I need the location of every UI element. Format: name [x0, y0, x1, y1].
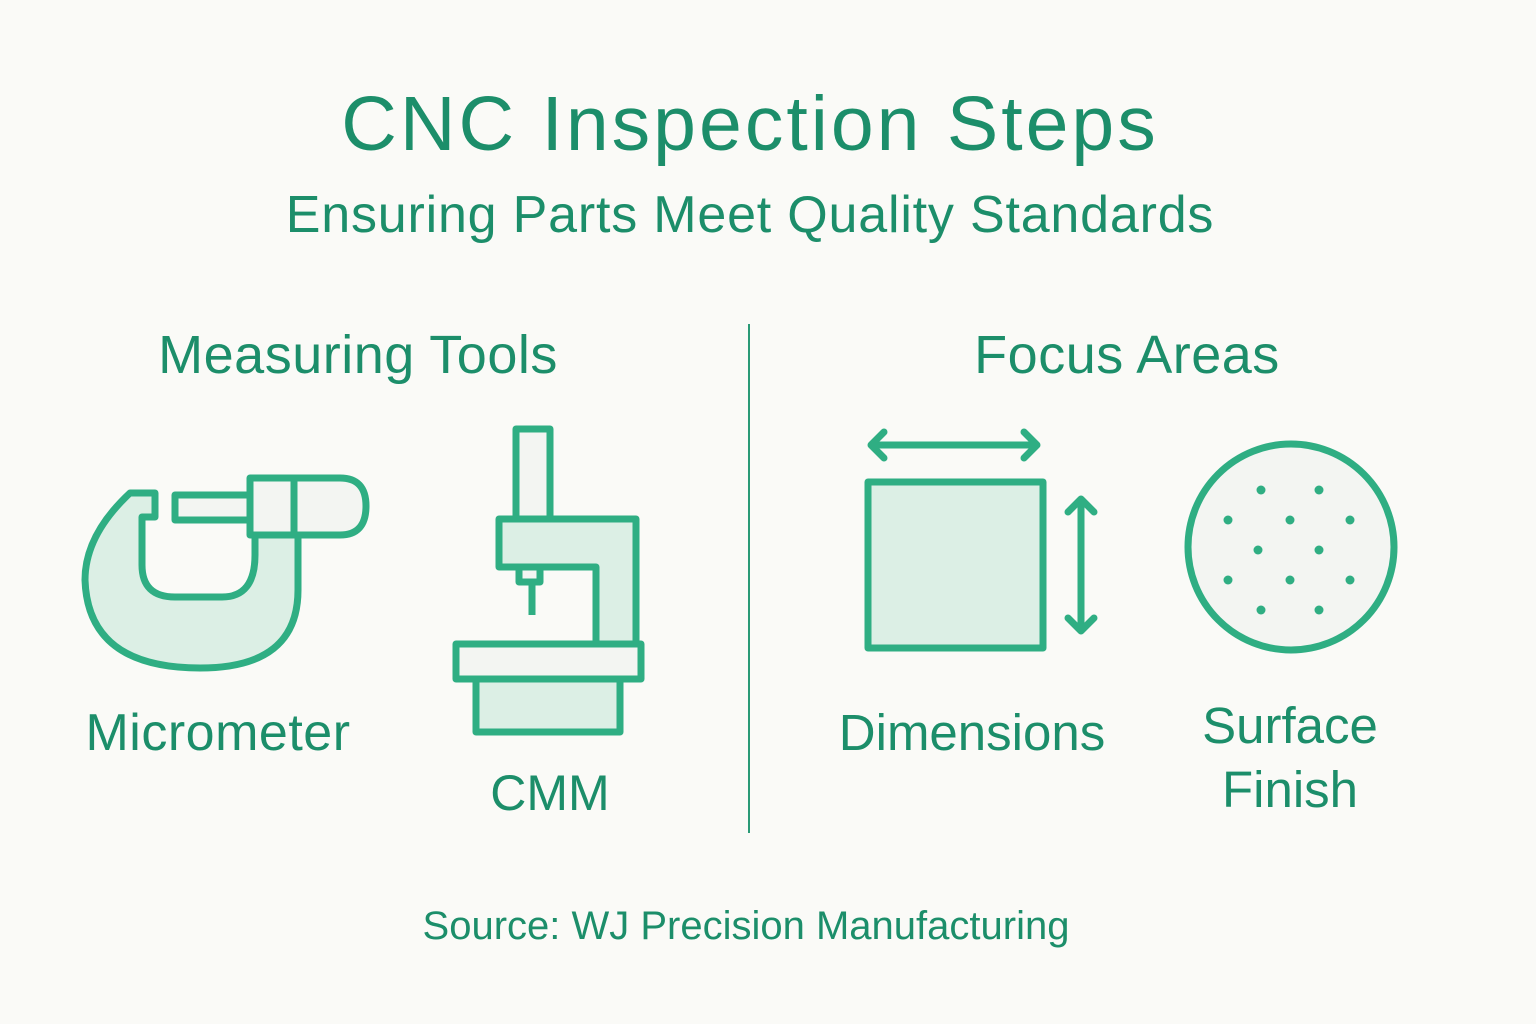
label: surface finish: Finish	[1222, 761, 1358, 818]
subtitle: Ensuring Parts Meet Quality Standards	[286, 186, 1214, 244]
heading: focus areas: Focus Areas	[974, 325, 1280, 385]
icon: micrometer	[85, 478, 366, 668]
icon: CMM	[456, 429, 641, 732]
label: surface finish: Surface	[1202, 697, 1378, 754]
label: micrometer: Micrometer	[85, 704, 351, 762]
label: CMM: CMM	[490, 765, 610, 821]
title: CNC Inspection Steps	[341, 81, 1159, 167]
icon: surface finish	[1188, 444, 1394, 650]
label: dimensions: Dimensions	[839, 704, 1105, 761]
icon: dimensions	[868, 432, 1094, 648]
label: surface finish	[1202, 697, 1378, 818]
heading: measuring tools: Measuring Tools	[158, 325, 558, 385]
source: Source: WJ Precision Manufacturing	[423, 904, 1069, 948]
